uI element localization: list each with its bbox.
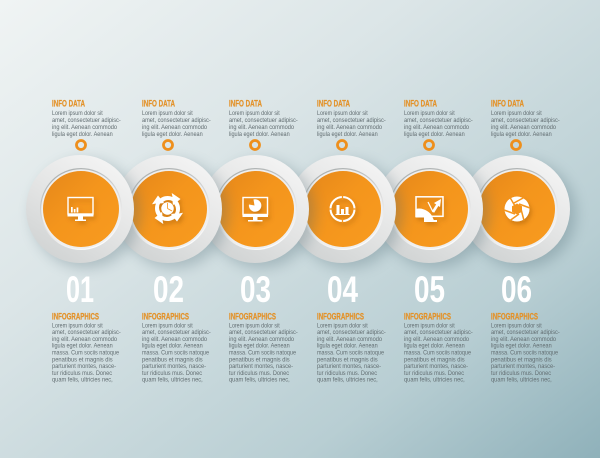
icon: monitor with arrow <box>416 197 443 222</box>
top text block 5: Lorem ipsum dolor sit <box>404 110 455 117</box>
top text block 3: ing elit. Aenean commodo <box>229 124 294 131</box>
circle 2 <box>114 155 228 268</box>
bottom text block 6: tur ridiculus mus. Donec <box>491 370 552 377</box>
bottom text block 3: parturient montes, nasce- <box>229 363 293 370</box>
connector ring 4 <box>338 140 346 150</box>
bottom text block 5: INFOGRAPHICS <box>404 312 451 322</box>
bottom text block 1: parturient montes, nasce- <box>52 363 116 370</box>
bottom text block 1: tur ridiculus mus. Donec <box>52 370 113 377</box>
bottom text block 4: tur ridiculus mus. Donec <box>317 370 378 377</box>
icon: cycle arrows with pie <box>152 193 183 224</box>
top text block 1 <box>52 98 121 138</box>
bottom text block 2: amet, consectetuer adipisc- <box>142 329 211 336</box>
bottom text block 5: Lorem ipsum dolor sit <box>404 322 455 329</box>
bottom text block 2: INFOGRAPHICS <box>142 312 189 322</box>
top text block 6: Lorem ipsum dolor sit <box>491 110 542 117</box>
top text block 1: ligula eget dolor. Aenean <box>52 131 113 138</box>
bottom text block 2: ligula eget dolor. Aenean <box>142 343 203 350</box>
circle 5 <box>375 155 489 268</box>
number 04: 04 <box>327 269 358 310</box>
top text block 3: ligula eget dolor. Aenean <box>229 131 290 138</box>
bottom text block 4: amet, consectetuer adipisc- <box>317 329 386 336</box>
bottom text block 4: INFOGRAPHICS <box>317 312 364 322</box>
top text block 6: amet, consectetuer adipisc- <box>491 117 560 124</box>
bottom text block 2: Lorem ipsum dolor sit <box>142 322 193 329</box>
bottom text block 6: quam felis, ultricies nec, <box>491 377 552 384</box>
top text block 2: ligula eget dolor. Aenean <box>142 131 203 138</box>
bottom text block 4: parturient montes, nasce- <box>317 363 381 370</box>
bottom text block 6: ing elit. Aenean commodo <box>491 336 556 343</box>
bottom text block 3: Lorem ipsum dolor sit <box>229 322 280 329</box>
circle 1 <box>26 155 140 268</box>
bottom text block 5: tur ridiculus mus. Donec <box>404 370 465 377</box>
bottom text block 4: penatibus et magnis dis <box>317 356 378 363</box>
top text block 6: ing elit. Aenean commodo <box>491 124 556 131</box>
bottom text block 4: massa. Cum sociis natoque <box>317 350 384 356</box>
top text block 1: Lorem ipsum dolor sit <box>52 110 103 117</box>
bottom text block 1: amet, consectetuer adipisc- <box>52 329 121 336</box>
connector ring 2 <box>164 140 172 150</box>
bottom text block 2: ing elit. Aenean commodo <box>142 336 207 343</box>
top text block 5 <box>404 98 473 138</box>
number 06: 06 <box>501 269 532 310</box>
bottom text block 6: ligula eget dolor. Aenean <box>491 343 552 350</box>
top text block 5: ligula eget dolor. Aenean <box>404 131 465 138</box>
bottom text block 5 <box>404 312 473 384</box>
top text block 1: INFO DATA <box>52 98 85 110</box>
connector ring 6 <box>512 140 520 150</box>
bottom text block 2: quam felis, ultricies nec, <box>142 377 203 384</box>
icon: monitor with pie chart <box>242 198 268 222</box>
bottom text block 2 <box>142 312 211 384</box>
bottom text block 6: parturient montes, nasce- <box>491 363 555 370</box>
bottom text block 2: massa. Cum sociis natoque <box>142 350 209 356</box>
top text block 2: ing elit. Aenean commodo <box>142 124 207 131</box>
top text block 2: INFO DATA <box>142 98 175 110</box>
bottom text block 1 <box>52 312 121 384</box>
bottom text block 2: penatibus et magnis dis <box>142 356 203 363</box>
bottom text block 4: ligula eget dolor. Aenean <box>317 343 378 350</box>
connector ring 3 <box>250 140 260 150</box>
number 03: 03 <box>240 269 271 310</box>
top text block 1: ing elit. Aenean commodo <box>52 124 117 131</box>
top text block 3 <box>229 98 298 138</box>
bottom text block 4: quam felis, ultricies nec, <box>317 377 378 384</box>
bottom text block 3: amet, consectetuer adipisc- <box>229 329 298 336</box>
bottom text block 5: penatibus et magnis dis <box>404 356 465 363</box>
icon: monitor with bar chart <box>68 198 94 221</box>
top text block 6 <box>491 98 560 138</box>
top text block 4 <box>317 98 386 138</box>
bottom text block 3: ligula eget dolor. Aenean <box>229 343 290 350</box>
bottom text block 6: INFOGRAPHICS <box>491 312 538 322</box>
top text block 2: Lorem ipsum dolor sit <box>142 110 193 117</box>
top text block 3: Lorem ipsum dolor sit <box>229 110 280 117</box>
connector ring 5 <box>424 140 434 150</box>
top text block 4: Lorem ipsum dolor sit <box>317 110 368 117</box>
circle 6 <box>462 155 576 268</box>
bottom text block 3: INFOGRAPHICS <box>229 312 276 322</box>
top text block 3: amet, consectetuer adipisc- <box>229 117 298 124</box>
bottom text block 1: penatibus et magnis dis <box>52 356 113 363</box>
bottom text block 3: tur ridiculus mus. Donec <box>229 370 290 377</box>
bottom text block 6: massa. Cum sociis natoque <box>491 350 558 356</box>
top text block 4: INFO DATA <box>317 98 350 110</box>
bottom text block 5: ing elit. Aenean commodo <box>404 336 469 343</box>
bottom text block 5: amet, consectetuer adipisc- <box>404 329 473 336</box>
bottom text block 1: massa. Cum sociis natoque <box>52 350 119 356</box>
top text block 5: amet, consectetuer adipisc- <box>404 117 473 124</box>
bottom text block 1: ing elit. Aenean commodo <box>52 336 117 343</box>
bottom text block 3: massa. Cum sociis natoque <box>229 350 296 356</box>
bottom text block 2: parturient montes, nasce- <box>142 363 206 370</box>
bottom text block 3: penatibus et magnis dis <box>229 356 290 363</box>
top text block 4: amet, consectetuer adipisc- <box>317 117 386 124</box>
bottom text block 1: ligula eget dolor. Aenean <box>52 343 113 350</box>
top text block 6: ligula eget dolor. Aenean <box>491 131 552 138</box>
top text block 2 <box>142 98 211 138</box>
bottom text block 6: Lorem ipsum dolor sit <box>491 322 542 329</box>
icon: round bar chart <box>328 195 356 223</box>
number 01: 01 <box>66 269 94 310</box>
circle 4 <box>288 155 402 268</box>
bottom text block 6 <box>491 312 560 384</box>
bottom text block 2: tur ridiculus mus. Donec <box>142 370 203 377</box>
bottom text block 6: amet, consectetuer adipisc- <box>491 329 560 336</box>
top text block 6: INFO DATA <box>491 98 524 110</box>
connector ring 1 <box>76 140 86 150</box>
bottom text block 5: parturient montes, nasce- <box>404 363 468 370</box>
bottom text block 6: penatibus et magnis dis <box>491 356 552 363</box>
top text block 3: INFO DATA <box>229 98 262 110</box>
top text block 1: amet, consectetuer adipisc- <box>52 117 121 124</box>
top text block 4: ligula eget dolor. Aenean <box>317 131 378 138</box>
bottom text block 4: Lorem ipsum dolor sit <box>317 322 368 329</box>
number 05: 05 <box>414 269 445 310</box>
bottom text block 5: ligula eget dolor. Aenean <box>404 343 465 350</box>
number 02: 02 <box>153 269 184 310</box>
top text block 5: INFO DATA <box>404 98 437 110</box>
bottom text block 4 <box>317 312 386 384</box>
icon: camera aperture <box>504 196 530 222</box>
bottom text block 3: quam felis, ultricies nec, <box>229 377 290 384</box>
bottom text block 1: quam felis, ultricies nec, <box>52 377 113 384</box>
bottom text block 3 <box>229 312 298 384</box>
circle 3 <box>201 155 315 268</box>
bottom text block 5: quam felis, ultricies nec, <box>404 377 465 384</box>
bottom text block 5: massa. Cum sociis natoque <box>404 350 471 356</box>
top text block 2: amet, consectetuer adipisc- <box>142 117 211 124</box>
bottom text block 1: INFOGRAPHICS <box>52 312 99 322</box>
bottom text block 4: ing elit. Aenean commodo <box>317 336 382 343</box>
top text block 5: ing elit. Aenean commodo <box>404 124 469 131</box>
bottom text block 1: Lorem ipsum dolor sit <box>52 322 103 329</box>
top text block 4: ing elit. Aenean commodo <box>317 124 382 131</box>
bottom text block 3: ing elit. Aenean commodo <box>229 336 294 343</box>
